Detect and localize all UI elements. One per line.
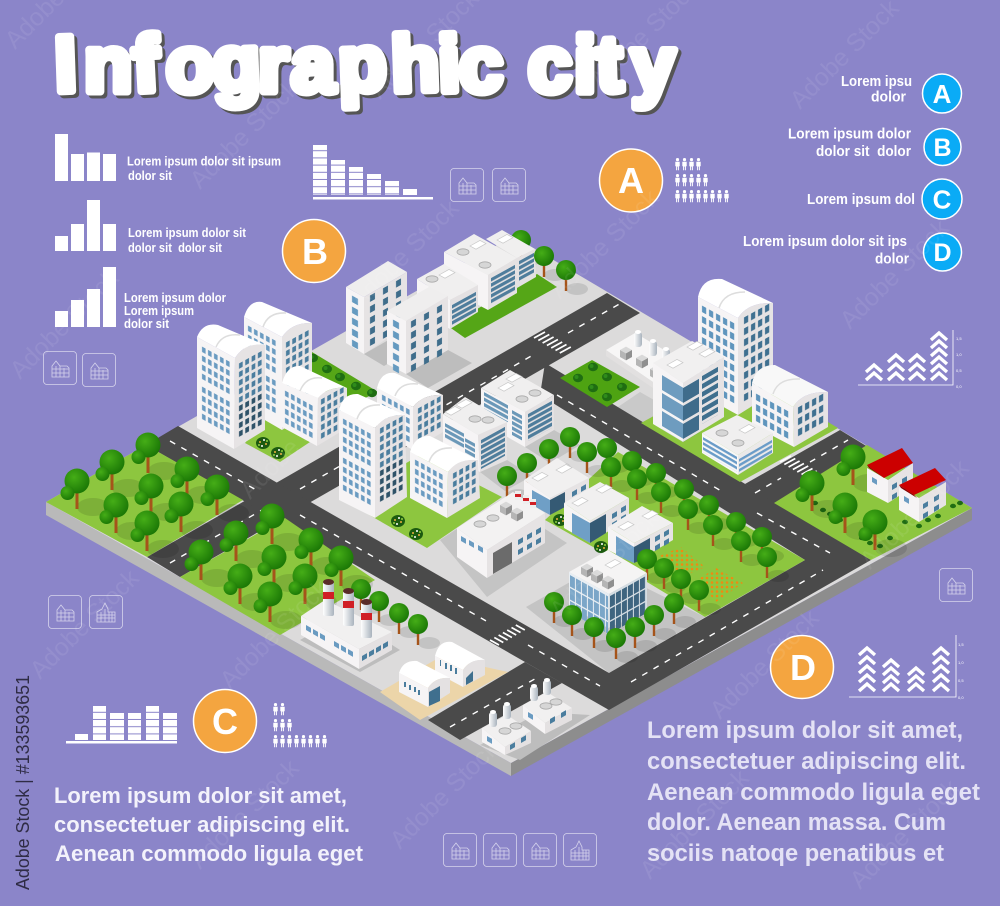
legend row B: dolor sit dolor: [816, 144, 911, 160]
legend row C: C: [933, 184, 952, 214]
rooftop plant slab: [606, 330, 690, 388]
bar chart: left 1: [55, 134, 116, 181]
icon: right house: [940, 568, 972, 602]
watermark: Adobe Stock: [184, 74, 305, 194]
building: factory hall: [457, 491, 545, 578]
text: lower left paragraph: consectetuer adipiscing elit.: [54, 812, 350, 837]
building: office mid front: [443, 397, 507, 472]
trees: rear street: [534, 246, 588, 295]
bar chart: left 2: [55, 200, 116, 251]
building: workshop three: [608, 506, 673, 563]
segmented bar chart: top: [313, 145, 433, 200]
building: low striped office: [702, 415, 773, 475]
building: tower six: [410, 436, 480, 518]
legend row C: Lorem ipsum dol: [807, 192, 915, 208]
chevron chart: lower right: 1,0: [958, 660, 964, 665]
building: arched block right: [752, 365, 828, 447]
trees: factory row: [351, 579, 440, 649]
legend row C: [807, 179, 962, 219]
platform base: [46, 236, 972, 776]
building: factory: [301, 579, 392, 669]
roads: [146, 293, 871, 740]
building: workshop two: [564, 482, 629, 543]
icons: top house pair: [450, 168, 526, 202]
legend row B: B: [933, 134, 952, 162]
text: left 2: [128, 225, 247, 255]
trees: park one: [60, 432, 249, 558]
building: tower one: [197, 324, 265, 449]
tree: behind north offices: [511, 230, 543, 265]
legend row A: Lorem ipsu: [841, 74, 912, 90]
watermark: Adobe Stock: [854, 454, 975, 574]
building: tower four: [339, 394, 407, 518]
small hedges: right block: [812, 501, 963, 548]
legend row A: dolor: [871, 90, 906, 106]
text: left 2: dolor sit dolor sit: [128, 240, 223, 255]
ground patches: [300, 338, 705, 760]
segmented bar chart: lower left: [66, 706, 177, 744]
trees: right block: [796, 444, 885, 518]
text: left 1: [127, 154, 281, 183]
watermark: Adobe Stock: [544, 504, 665, 624]
trees: around glass block: [544, 592, 696, 663]
building: apartment block two: [387, 287, 449, 377]
badge D orange: D: [790, 647, 816, 688]
legend row A: [841, 74, 962, 113]
building: workshop one: [524, 458, 589, 515]
bushes: small park and strips: [256, 354, 627, 553]
trees: centre lower right: [678, 499, 789, 582]
text: left 3: Lorem ipsum: [124, 303, 194, 318]
building: office mid rear: [481, 370, 554, 447]
stock id vertical text: Adobe Stock | #133593651: [13, 675, 33, 890]
trees: centre upper: [497, 427, 678, 501]
watermark: Adobe Stock: [4, 264, 125, 384]
legend row B: [788, 126, 961, 166]
green parcels: [46, 274, 972, 635]
chevron chart: upper right: 1,0: [956, 352, 962, 357]
chevron chart: lower right: [849, 635, 964, 700]
building: apartment block one: [346, 261, 408, 354]
bar chart: left 3: [55, 267, 116, 327]
chevron chart: upper right: 1,5: [956, 336, 962, 341]
people pictogram A: [675, 158, 729, 202]
legend row D: dolor: [875, 252, 909, 268]
watermark: Adobe Stock: [544, 184, 665, 304]
legend row B: Lorem ipsum dolor: [788, 126, 911, 142]
building: glass office: [653, 341, 724, 442]
watermark: Adobe Stock: [234, 384, 355, 504]
badge C orange: C: [212, 701, 238, 742]
icons: left house pair: [44, 352, 116, 386]
badge D orange: [770, 636, 834, 698]
watermark: Adobe Stock: [844, 774, 965, 894]
watermark: Adobe Stock: [634, 764, 755, 884]
watermark: Adobe Stock: [344, 194, 465, 314]
icons: lower left pair: [48, 596, 122, 628]
legend row D: Lorem ipsum dolor sit ips: [743, 234, 907, 250]
building: tall tower right: [698, 279, 773, 415]
badge B orange: [282, 220, 346, 282]
crop field: [657, 547, 743, 602]
badge C orange: [194, 690, 256, 752]
building: tower five: [377, 373, 443, 450]
watermark: Adobe Stock: [24, 564, 145, 684]
text: left 1: Lorem ipsum dolor sit ipsum: [127, 154, 281, 168]
legend row D: [743, 233, 962, 271]
text: left 3: dolor sit: [124, 316, 170, 331]
building: red roof house one: [867, 448, 913, 503]
text: left 2: Lorem ipsum dolor sit: [128, 225, 247, 240]
legend row D: D: [933, 239, 952, 267]
building: plant right: [523, 678, 572, 734]
text: lower right paragraph: Lorem ipsum dolor sit amet,: [647, 717, 963, 744]
trees: centre middle: [627, 469, 731, 530]
title: Infographic city: [53, 18, 675, 109]
trees: field edge: [637, 549, 721, 615]
text: left 3: Lorem ipsum dolor: [124, 290, 226, 305]
building: office rear right: [486, 230, 536, 288]
text: lower right paragraph: dolor. Aenean massa. Cum: [647, 809, 946, 836]
building: tower three: [282, 366, 347, 446]
building: tower two: [244, 302, 312, 430]
legend row A: A: [933, 79, 952, 109]
text: lower right paragraph: consectetuer adipiscing elit.: [647, 748, 966, 775]
watermark: Adobe Stock: [184, 754, 305, 874]
watermark: Adobe Stock: [214, 574, 335, 694]
badge A orange: A: [618, 160, 644, 201]
trees: park two: [184, 504, 373, 629]
badge B orange: B: [302, 231, 328, 272]
chevron chart: upper right: 0,0: [956, 384, 962, 389]
building: hangar front: [399, 661, 450, 707]
watermark: Adobe Stock: [704, 604, 825, 724]
chevron chart: lower right: 0,5: [958, 678, 964, 683]
watermark: Adobe Stock: [834, 214, 955, 334]
building: office large: [444, 234, 517, 310]
text: lower right paragraph: sociis natoqe penatibus et: [647, 840, 944, 867]
isometric city: [46, 230, 972, 776]
watermark: Adobe Stock: [384, 734, 505, 854]
text: lower left paragraph: [54, 783, 364, 866]
text: left 1: dolor sit: [128, 168, 173, 183]
chevron chart: lower right: 0,0: [958, 695, 964, 700]
building: office small rear: [417, 264, 478, 329]
text: lower right paragraph: Aenean commodo ligula eget: [647, 779, 980, 806]
building: hangar rear: [435, 642, 485, 687]
text: lower right paragraph: [647, 717, 980, 867]
text: left 3: [124, 290, 226, 331]
chevron chart: upper right: 0,5: [956, 368, 962, 373]
chevron chart: lower right: 1,5: [958, 642, 964, 647]
badge A orange: [600, 149, 662, 212]
road markings: [170, 302, 848, 727]
people pictogram C: [273, 703, 327, 747]
trees: right block front: [828, 492, 907, 557]
building: plant left: [482, 702, 531, 755]
building: glass block: [569, 550, 647, 635]
chevron chart: upper right: [858, 330, 962, 389]
building: red roof house two: [899, 468, 946, 522]
text: lower left paragraph: Aenean commodo ligula eget: [55, 841, 364, 866]
text: lower left paragraph: Lorem ipsum dolor sit amet,: [54, 783, 347, 808]
icons: bottom row: [444, 834, 596, 866]
